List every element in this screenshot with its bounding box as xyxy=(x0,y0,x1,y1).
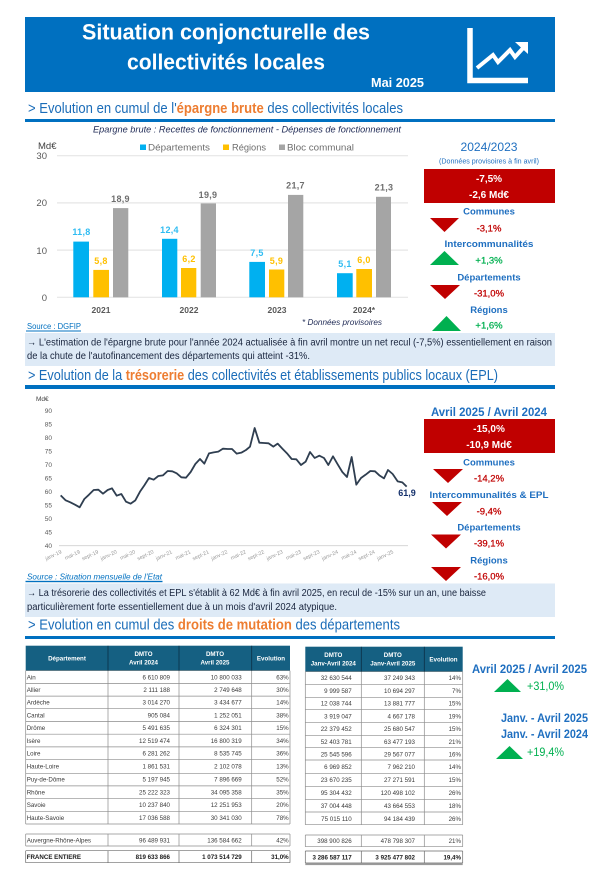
bars 2021: 5,8 xyxy=(94,256,108,266)
x axis labels: janv-21 xyxy=(154,549,173,563)
y axis labels: 30 xyxy=(36,151,47,162)
table rows: 34 095 358 xyxy=(211,790,242,796)
table rows: Allier xyxy=(27,687,40,694)
bars 2021 xyxy=(72,194,130,315)
bars 2024: 2024* xyxy=(353,305,376,315)
régions xyxy=(432,305,508,332)
table rows: 10 800 033 xyxy=(211,674,242,682)
y axis labels: Md€ xyxy=(38,141,57,152)
table rows: 94 184 439 xyxy=(384,816,416,823)
comment box: trésorerie xyxy=(25,584,555,617)
table rows: 23 670 235 xyxy=(321,777,352,784)
table rows: 478 798 307 xyxy=(381,838,416,845)
table rows: 30 341 030 xyxy=(211,815,242,822)
bars 2024: 21,3 xyxy=(375,182,393,192)
y axis labels: 85 xyxy=(45,422,52,428)
avril comparison: +31,0% xyxy=(527,681,564,693)
red callout: -7,5% xyxy=(476,174,502,185)
table rows: 6 969 852 xyxy=(324,764,352,771)
y axis labels: 50 xyxy=(45,516,52,523)
x axis labels xyxy=(44,549,395,563)
x axis labels: mai-24 xyxy=(341,549,358,562)
table rows: 25 545 596 xyxy=(321,751,352,758)
table rows: Auvergne-Rhône-Alpes xyxy=(27,837,91,844)
communes xyxy=(430,206,515,234)
comment box: épargne xyxy=(25,333,555,366)
table rows: 15% xyxy=(276,725,289,732)
table rows: 7% xyxy=(452,688,461,695)
y axis labels: 75 xyxy=(45,448,52,456)
source: situation mensuelle: Source : Situation mensuelle de l'Etat xyxy=(27,572,163,582)
bars 2022: 2022 xyxy=(180,305,199,315)
legend: Régions xyxy=(232,142,266,154)
table rows: 12 038 744 xyxy=(321,701,352,708)
x axis labels: sept-21 xyxy=(192,549,210,562)
header banner xyxy=(25,17,555,92)
panel heading: Avril 2025 / Avril 2024 xyxy=(431,407,548,419)
y axis labels: 40 xyxy=(45,543,52,550)
table rows: 27 271 591 xyxy=(384,777,416,784)
x axis labels: janv-22 xyxy=(210,549,229,563)
avril comparison xyxy=(472,664,588,693)
panel: épargne 2024/2023 key figures xyxy=(424,140,555,332)
intercommunalités et EPL: -9,4% xyxy=(477,506,502,518)
x axis labels: sept-24 xyxy=(358,549,376,562)
table header xyxy=(305,647,463,672)
table rows: 136 584 662 xyxy=(207,837,242,844)
table header: Département xyxy=(48,656,86,662)
table rows: 3 014 270 xyxy=(142,700,171,707)
table rows: 12 519 474 xyxy=(139,738,171,745)
table rows: 37 004 448 xyxy=(321,803,352,810)
y axis labels: 80 xyxy=(45,435,52,442)
table rows: 30% xyxy=(276,687,289,694)
section heading: droits de mutation: > Evolution en cumul des droits de mutation des départements xyxy=(28,618,400,634)
table rows: 7 896 669 xyxy=(214,777,242,784)
table header xyxy=(26,646,290,671)
red callout: -15,0% xyxy=(473,424,505,435)
table rows: 6 324 301 xyxy=(214,725,242,732)
red callout: -10,9 Md€ xyxy=(466,440,512,451)
source: DGFIP: Source : DGFIP xyxy=(27,322,81,331)
comment box: trésorerie: → La trésorerie des collectivités et EPL s'établit à 62 Md€ à fin avril 2025, en recul de -15% sur un an, une baisse xyxy=(27,588,486,599)
table rows: 2 749 648 xyxy=(214,687,242,694)
table rows: 75 015 110 xyxy=(321,816,352,823)
départements: -39,1% xyxy=(474,538,505,550)
x axis labels: mai-22 xyxy=(230,549,247,562)
x axis labels: sept-19 xyxy=(81,549,100,562)
x axis labels: mai-23 xyxy=(285,549,302,562)
table header: Evolution xyxy=(257,656,285,662)
table rows: 21% xyxy=(449,739,461,746)
table rows: 1 861 531 xyxy=(142,764,171,771)
table rows: 12 251 953 xyxy=(211,802,242,809)
y axis labels: 90 xyxy=(45,408,52,415)
départements xyxy=(431,522,521,550)
table rows: 1 073 514 729 xyxy=(202,854,242,861)
communes: Communes xyxy=(463,458,515,468)
y axis labels: 45 xyxy=(45,530,52,536)
table rows: 16% xyxy=(449,751,461,758)
table rows: 18% xyxy=(449,803,461,810)
intercommunalités xyxy=(430,239,534,266)
table rows: 95 304 432 xyxy=(321,790,352,797)
table rows: 14% xyxy=(449,675,461,682)
table rows: 96 489 931 xyxy=(139,837,171,844)
table rows: 19% xyxy=(449,713,461,720)
table rows: 31,0% xyxy=(271,854,289,861)
table rows: 8 535 745 xyxy=(214,750,242,758)
bars 2024: 6,0 xyxy=(357,255,371,265)
table rows: 25 680 547 xyxy=(384,726,416,733)
table rows: Ardèche xyxy=(27,700,50,707)
table rows: Rhône xyxy=(27,790,45,796)
table rows: 34% xyxy=(276,738,289,745)
end value: 61,9 xyxy=(398,488,416,498)
table rows: 120 498 102 xyxy=(381,790,416,797)
red callout xyxy=(424,169,555,203)
bars 2023: 2023 xyxy=(268,305,287,315)
table rows: 6 281 262 xyxy=(142,750,171,758)
legend: Bloc communal xyxy=(287,142,354,154)
table: DMTO avril xyxy=(26,646,290,863)
table rows: 25 222 323 xyxy=(139,790,171,796)
table rows: 905 084 xyxy=(148,712,171,720)
y axis labels: 65 xyxy=(45,476,52,482)
communes xyxy=(433,458,515,484)
table header: Avril 2024 xyxy=(129,660,159,666)
départements: -31,0% xyxy=(474,288,505,300)
table rows: 3 919 047 xyxy=(324,713,352,720)
table header: Janv-Avril 2024 xyxy=(311,660,356,668)
y axis labels: 20 xyxy=(36,198,47,209)
table rows: 10 237 840 xyxy=(139,802,171,809)
table rows: 5 197 945 xyxy=(142,777,171,784)
table rows: 15% xyxy=(449,726,461,733)
comment box: trésorerie: particulièrement forte essentiellement due à un mois d'avril 2024 atypique. xyxy=(27,602,337,613)
table rows xyxy=(312,675,461,862)
bars 2022: 12,4 xyxy=(160,225,179,235)
table rows: Savoie xyxy=(27,802,46,809)
régions: +1,6% xyxy=(475,320,503,332)
table rows: 78% xyxy=(276,815,289,822)
bars 2023: 5,9 xyxy=(270,256,283,266)
janvier-avril comparison xyxy=(496,713,589,759)
table rows: 52 403 781 xyxy=(321,739,352,746)
table rows: 14% xyxy=(449,764,461,771)
icon: rising chart xyxy=(470,28,528,80)
bars 2022: 6,2 xyxy=(182,254,196,264)
table rows: 5 491 635 xyxy=(142,725,171,732)
x axis labels: sept-20 xyxy=(136,549,155,562)
table rows: 21% xyxy=(449,838,461,845)
panel note: (Données provisoires à fin avril) xyxy=(439,158,539,166)
intercommunalités et EPL xyxy=(430,490,549,518)
table header: Evolution xyxy=(429,656,458,664)
départements: Départements xyxy=(457,522,521,534)
title xyxy=(82,20,370,74)
x axis labels: sept-22 xyxy=(247,549,266,562)
data line xyxy=(61,428,407,507)
table rows: Drôme xyxy=(27,725,46,732)
bars 2021: 18,9 xyxy=(111,194,130,204)
bars 2024 xyxy=(337,182,393,315)
x axis labels: janv-24 xyxy=(320,549,339,563)
table header: Avril 2025 xyxy=(200,660,230,666)
table rows: 32 630 544 xyxy=(321,675,352,682)
table: DMTO janvier-avril xyxy=(305,647,463,865)
table rows: 17 036 588 xyxy=(139,815,171,822)
y axis labels: 0 xyxy=(42,293,47,304)
table header: DMTO xyxy=(206,651,224,658)
table header: Janv-Avril 2025 xyxy=(370,660,416,668)
chart subtitle: Epargne brute : Recettes de fonctionnement - Dépenses de fonctionnement xyxy=(93,124,401,134)
table rows: 43 664 553 xyxy=(384,803,416,810)
bars 2023: 21,7 xyxy=(286,180,305,190)
bars 2021: 2021 xyxy=(92,305,111,315)
table rows: Haute-Savoie xyxy=(27,815,65,822)
table rows: 9 999 587 xyxy=(324,688,352,695)
janvier-avril comparison: +19,4% xyxy=(527,747,564,759)
table rows: 14% xyxy=(276,700,289,707)
table rows: 20% xyxy=(276,802,289,809)
table rows: 37 249 343 xyxy=(384,675,416,682)
x axis labels: janv-20 xyxy=(99,549,118,563)
intercommunalités: Intercommunalités xyxy=(444,239,534,250)
table rows: 3 286 587 117 xyxy=(312,855,352,862)
table rows: 3 434 677 xyxy=(214,700,242,707)
table rows: Loire xyxy=(27,750,41,758)
y axis labels: 60 xyxy=(45,489,52,496)
legend xyxy=(140,142,354,154)
x axis labels: janv-19 xyxy=(44,549,63,563)
x axis labels: sept-23 xyxy=(302,549,321,562)
table rows: Puy-de-Dôme xyxy=(27,777,65,784)
bars 2023: 7,5 xyxy=(250,248,264,258)
table rows: 13% xyxy=(276,764,289,771)
panel heading: 2024/2023 xyxy=(460,140,518,154)
comment box: épargne: → L'estimation de l'épargne brute pour l'année 2024 actualisée à fin avril montre un net recul (-7,5%) essentiellement en raison xyxy=(27,338,552,348)
bars 2021: 11,8 xyxy=(72,227,91,237)
table rows: 36% xyxy=(276,750,289,758)
red callout xyxy=(424,419,555,453)
table rows: Ain xyxy=(27,674,36,682)
table rows: Cantal xyxy=(27,712,45,720)
table header: DMTO xyxy=(324,652,343,659)
régions xyxy=(431,556,508,582)
table rows: 52% xyxy=(276,777,289,784)
y axis labels: 10 xyxy=(36,246,47,257)
section heading: épargne brute xyxy=(25,101,555,122)
table rows: Isère xyxy=(27,738,41,745)
départements: Départements xyxy=(457,272,521,284)
table rows: 1 252 051 xyxy=(214,712,242,720)
panel: DMTO key figures xyxy=(472,664,589,759)
table rows: 2 111 188 xyxy=(143,687,171,694)
intercommunalités: +1,3% xyxy=(475,256,503,266)
table rows: 63% xyxy=(276,674,289,682)
table rows: 3 925 477 802 xyxy=(375,855,416,862)
x axis labels: mai-20 xyxy=(119,549,137,562)
table rows xyxy=(27,674,289,861)
bars 2023 xyxy=(249,180,305,315)
y axis labels: 70 xyxy=(45,462,52,469)
section heading: trésorerie: > Evolution de la trésorerie des collectivités et établissements publics locaux (EPL) xyxy=(28,368,498,384)
intercommunalités et EPL: Intercommunalités & EPL xyxy=(430,490,549,501)
table rows: 16 800 319 xyxy=(211,738,242,745)
x axis labels: janv-23 xyxy=(265,549,284,563)
x axis labels: mai-19 xyxy=(64,549,81,562)
table grid xyxy=(26,646,290,863)
y axis labels xyxy=(36,396,52,550)
table rows: 29 567 077 xyxy=(384,751,416,758)
section heading: droits de mutation xyxy=(25,618,555,639)
table rows: 15% xyxy=(449,777,461,784)
bar chart: épargne brute xyxy=(36,141,408,315)
table rows: 398 900 826 xyxy=(317,838,352,845)
départements xyxy=(430,272,521,300)
legend: Départements xyxy=(148,142,210,154)
title: Situation conjoncturelle des xyxy=(82,20,370,44)
communes: -14,2% xyxy=(474,474,505,484)
table rows: 13 881 777 xyxy=(384,701,416,708)
table rows: 26% xyxy=(449,816,461,823)
red callout: -2,6 Md€ xyxy=(469,190,509,201)
bars 2022: 19,9 xyxy=(199,190,217,200)
table rows: 4 667 178 xyxy=(387,713,416,720)
bars 2024: 5,1 xyxy=(338,259,352,269)
communes: Communes xyxy=(463,206,515,218)
comment box: épargne: de la chute de l'autofinancement des départements qui atteint -31%. xyxy=(27,351,310,362)
y axis labels xyxy=(36,141,57,304)
janvier-avril comparison: Janv. - Avril 2025 xyxy=(501,713,589,725)
table rows: 19,4% xyxy=(443,855,461,862)
x axis labels: janv-25 xyxy=(375,549,395,563)
régions: Régions xyxy=(470,305,508,316)
table rows: 10 694 297 xyxy=(384,688,416,695)
x axis labels: mai-21 xyxy=(175,549,192,562)
régions: -16,0% xyxy=(474,572,505,582)
table header: DMTO xyxy=(134,651,153,658)
table rows: 26% xyxy=(449,790,461,797)
section heading: épargne brute: > Evolution en cumul de l'épargne brute des collectivités locales xyxy=(28,101,403,117)
communes: -3,1% xyxy=(477,224,502,234)
table rows: FRANCE ENTIERE xyxy=(27,854,81,861)
table rows: Haute-Loire xyxy=(27,764,60,771)
table rows: 819 633 866 xyxy=(136,854,171,861)
title: collectivités locales xyxy=(127,50,325,74)
table rows: 38% xyxy=(276,712,289,720)
line chart: trésorerie xyxy=(36,396,416,563)
table grid xyxy=(305,647,463,865)
bars 2022 xyxy=(160,190,217,315)
table rows: 2 102 078 xyxy=(214,764,242,771)
footnote: données provisoires: * Données provisoires xyxy=(302,318,382,327)
date: Mai 2025 xyxy=(371,75,424,90)
table rows: 6 610 809 xyxy=(142,674,171,682)
table rows: 15% xyxy=(449,701,461,708)
table rows: 63 477 193 xyxy=(384,739,416,746)
table header: DMTO xyxy=(384,652,402,659)
janvier-avril comparison: Janv. - Avril 2024 xyxy=(501,729,589,741)
table rows: 42% xyxy=(276,837,289,844)
régions: Régions xyxy=(470,556,508,566)
y axis labels: 55 xyxy=(45,502,52,510)
avril comparison: Avril 2025 / Avril 2025 xyxy=(472,664,588,676)
table rows: 7 962 210 xyxy=(387,764,416,771)
table rows: 22 379 452 xyxy=(321,726,352,733)
y axis labels: Md€ xyxy=(36,396,49,403)
panel: trésorerie key figures xyxy=(424,407,555,582)
table rows: 35% xyxy=(276,790,289,796)
